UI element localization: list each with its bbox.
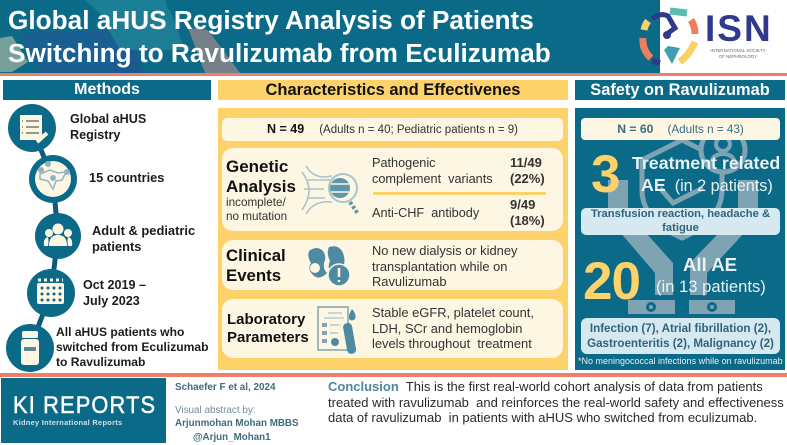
text: registry [70, 112, 146, 142]
text: patients: Adult & pediatric [92, 223, 195, 238]
N box safety: N = 60 (Adults n = 43) [617, 122, 744, 136]
text: clinical heading: Clinical [226, 246, 286, 265]
ISN logo [639, 8, 698, 66]
text: lab result: LDH, SCr and hemoglobin [372, 320, 522, 336]
text: 9/49: (18%) [510, 213, 545, 228]
text: conclusion [328, 379, 784, 425]
icon: ISN ring [643, 11, 695, 63]
coral divider [0, 373, 787, 377]
text: all patients [56, 325, 209, 369]
text: KI subtitle: Kidney International Reports [13, 418, 122, 427]
box: transfusion: Transfusion reaction, headache & [591, 208, 770, 220]
text: lab heading: Laboratory [227, 311, 305, 328]
stat: 3: 3 [591, 145, 620, 204]
text: dates: Oct 2019 – [83, 278, 146, 292]
N box safety [581, 118, 780, 140]
text: incomplete: no mutation [226, 210, 287, 223]
text: clinical heading [226, 246, 286, 285]
text: genetic heading: Genetic [226, 157, 288, 176]
heading: Characteristics [218, 80, 568, 100]
heading: Characteristics: Characteristics and Effectivenes [266, 81, 520, 99]
N box [222, 118, 563, 141]
text: all AE: All AE [683, 254, 737, 275]
text: AE in 2 patients: AE (in 2 patients) [641, 175, 773, 195]
title: Switching to Ravulizumab from Eculizumab [8, 38, 551, 68]
heading: Methods [3, 80, 211, 100]
card: genetic analysis [222, 148, 563, 231]
text: genetic heading [226, 157, 296, 196]
text: 11/49: 11/49 [510, 155, 542, 170]
icon: globe [29, 155, 77, 203]
panel: safety [575, 108, 785, 370]
text: patients [92, 223, 195, 254]
text: lab heading: Parameters [227, 329, 309, 346]
text: lab result: Stable eGFR, platelet count, [372, 305, 534, 320]
text: registry: Global aHUS [70, 112, 146, 126]
box: transfusion: fatigue [662, 222, 699, 234]
divider [373, 192, 546, 195]
text: 9/49: 9/49 [510, 197, 535, 212]
text: pathogenic variants [372, 156, 493, 186]
title [8, 5, 551, 68]
text: incomplete [226, 196, 287, 223]
panel: characteristics [218, 108, 568, 370]
icon: registry [8, 104, 56, 152]
text: pathogenic variants: complement variants [372, 172, 493, 186]
text: clinical result: Ravulizumab [372, 274, 447, 289]
text: citation: Schaefer F et al, 2024 [175, 382, 275, 393]
footnote: *No meningococcal infections while on ravulizumab [578, 356, 783, 366]
box: all AE list [581, 318, 780, 354]
panel: methods timeline [6, 104, 81, 372]
text: visual abstract credit: Visual abstract by: [175, 405, 256, 416]
text: clinical result: No new dialysis or kidney [372, 243, 517, 258]
text: lab result [372, 305, 534, 351]
text: incomplete: incomplete/ [226, 196, 286, 209]
title: Global aHUS Registry Analysis of Patients [8, 5, 534, 35]
coral divider [0, 73, 787, 76]
icon: people [35, 213, 81, 259]
heading: Methods: Methods [74, 81, 140, 98]
ISN subtitle: INTERNATIONAL SOCIETY [710, 48, 766, 53]
text: lab result: levels throughout treatment [372, 336, 532, 351]
icon: lab report [317, 306, 356, 354]
text: all patients: to Ravulizumab [56, 355, 145, 369]
text: author [175, 418, 299, 443]
box: all AE list: Infection (7), Atrial fibrillation (2), [590, 322, 771, 335]
header band [0, 0, 660, 73]
footer: KI Reports [1, 378, 166, 443]
text: author: Arjunmohan Mohan MBBS [175, 418, 299, 429]
text: lab heading [227, 311, 309, 346]
card: clinical events [222, 240, 563, 290]
text: conclusion: treated with ravulizumab and reinforces the real-world safety and effectiveness [328, 394, 784, 410]
text: genetic heading: Analysis [226, 177, 296, 196]
card: laboratory parameters [222, 299, 563, 358]
box: all AE list: Gastroenteritis (2), Malignancy (2) [587, 337, 774, 350]
text: 11/49: (22%) [510, 171, 545, 186]
text: clinical result: transplantation while on [372, 258, 507, 274]
icon: vial [6, 324, 54, 372]
icon: calendar [27, 269, 75, 317]
text: treatment related: Treatment related [632, 153, 780, 173]
text: registry: Registry [70, 128, 120, 142]
icon: kidneys alert [308, 246, 350, 286]
ISN wordmark: ISN [705, 8, 773, 49]
icon: DNA magnifier [302, 166, 359, 214]
text: N = 49: N = 49 (Adults n = 40; Pediatric patients n = 9) [267, 122, 518, 136]
connector line [30, 128, 58, 348]
text: clinical result [372, 243, 518, 289]
text: 11/49 [510, 155, 545, 186]
text: author: @Arjun_Mohan1 [193, 432, 271, 443]
text: conclusion: data of ravulizumab in patients with aHUS who switched from eculizumab. [328, 410, 757, 425]
text: patients: patients [92, 239, 141, 254]
text: dates: July 2023 [83, 294, 140, 308]
text: dates [83, 278, 146, 308]
text: conclusion: Conclusion This is the first real-world cohort analysis of data from patients [328, 379, 763, 394]
box: transfusion [581, 208, 780, 235]
ISN subtitle [710, 48, 766, 58]
text: anti-CHF: Anti-CHF antibody [372, 206, 479, 220]
text: in 13 patients: (in 13 patients) [656, 277, 766, 296]
watermark: shield hands [608, 140, 758, 314]
text: pathogenic variants: Pathogenic [372, 156, 436, 170]
text: all patients: switched from Eculizumab [56, 340, 209, 354]
heading: Safety: Safety on Ravulizumab [590, 81, 770, 99]
text: KI REPORTS: KI REPORTS [13, 392, 156, 419]
text: clinical heading: Events [226, 266, 281, 285]
text: all patients: All aHUS patients who [56, 325, 184, 339]
ISN subtitle: OF NEPHROLOGY [719, 54, 757, 58]
text: 9/49 [510, 197, 545, 228]
stat: 20: 20 [583, 252, 640, 311]
text: countries: 15 countries [89, 170, 164, 185]
